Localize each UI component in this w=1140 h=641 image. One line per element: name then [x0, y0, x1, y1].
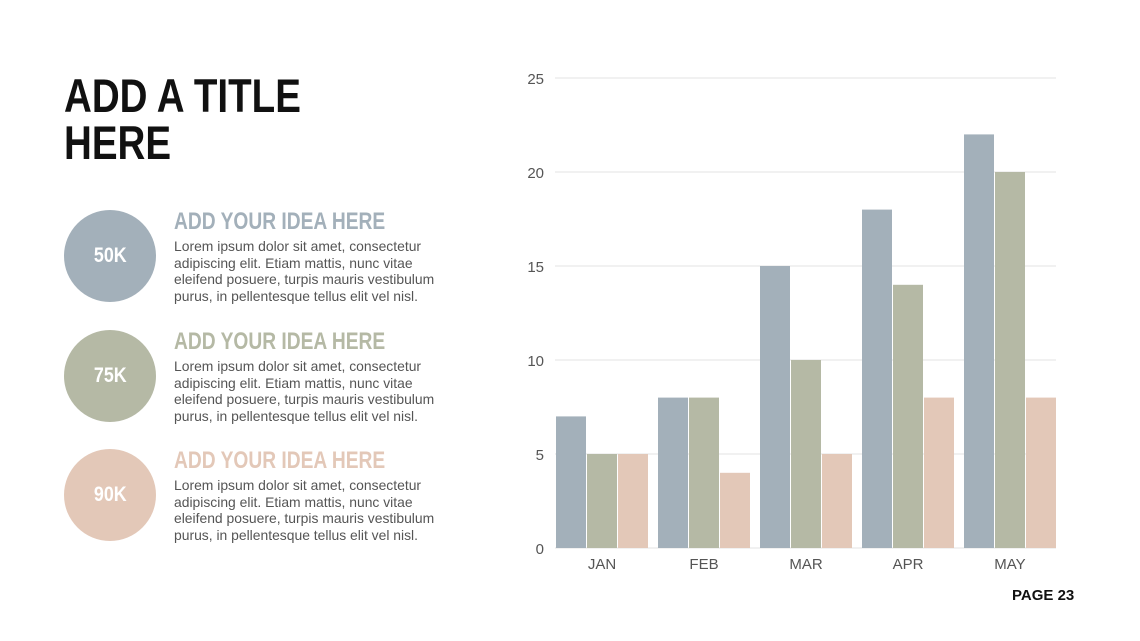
x axis labels: FEB	[689, 556, 719, 573]
item 1	[64, 208, 434, 304]
circle 75K: 75K	[94, 364, 126, 387]
x axis labels: JAN	[588, 556, 616, 573]
circle 50K: 50K	[94, 244, 126, 267]
heading 2: ADD YOUR IDEA HERE	[174, 328, 385, 355]
text 3: Lorem ipsum dolor sit amet, consectetur adipiscing elit. Etiam mattis, nunc vitae eleifend posuere, turpis mauris vestibulum purus, in pellentesque tellus elit vel nisl.	[174, 477, 434, 543]
circle 90K	[64, 449, 156, 541]
text 2: Lorem ipsum dolor sit amet, consectetur adipiscing elit. Etiam mattis, nunc vitae eleifend posuere, turpis mauris vestibulum purus, in pellentesque tellus elit vel nisl.	[174, 358, 434, 424]
heading 1: ADD YOUR IDEA HERE	[174, 208, 385, 235]
title: ADD A TITLE	[64, 69, 301, 122]
circle 90K: 90K	[94, 483, 126, 506]
title	[64, 69, 301, 169]
x axis labels: APR	[893, 556, 924, 573]
circle 75K	[64, 330, 156, 422]
item 2	[64, 328, 434, 424]
circle 50K	[64, 210, 156, 302]
text 1: Lorem ipsum dolor sit amet, consectetur adipiscing elit. Etiam mattis, nunc vitae eleifend posuere, turpis mauris vestibulum purus, in pellentesque tellus elit vel nisl.	[174, 238, 434, 304]
y axis labels	[527, 71, 544, 558]
y axis labels: 25	[527, 71, 544, 88]
x axis labels	[588, 556, 1026, 573]
x axis labels: MAR	[789, 556, 823, 573]
y axis labels: 15	[527, 259, 544, 276]
y axis labels: 20	[527, 165, 544, 182]
page number: PAGE 23	[1012, 587, 1074, 604]
bars	[556, 134, 1056, 548]
y axis labels: 5	[536, 447, 544, 464]
y axis labels: 10	[527, 353, 544, 370]
title: HERE	[64, 116, 171, 169]
y axis labels: 0	[536, 541, 544, 558]
heading 3: ADD YOUR IDEA HERE	[174, 447, 385, 474]
x axis labels: MAY	[994, 556, 1026, 573]
item 3	[64, 447, 434, 543]
